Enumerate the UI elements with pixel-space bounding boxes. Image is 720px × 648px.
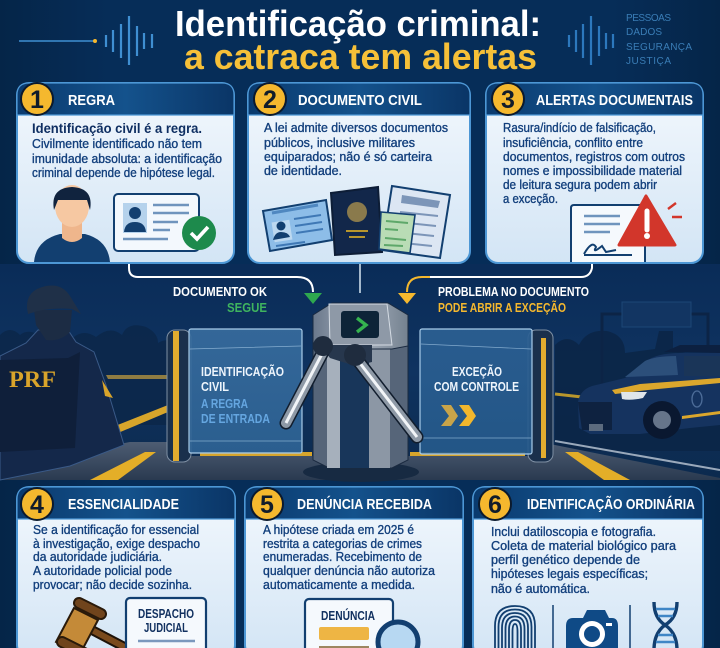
icon: complaint document	[305, 599, 393, 648]
gate text	[201, 364, 284, 426]
road	[0, 440, 720, 480]
header keywords: PESSOAS	[626, 13, 671, 24]
panel 6: identificação ordinária	[473, 487, 703, 648]
icon: complaint document: DENÚNCIA	[321, 608, 375, 623]
text block: Rasura/indício de falsificação,	[503, 120, 656, 135]
text block: de leitura segura podem abrir	[503, 177, 658, 192]
text block: provocar; não decide sozinha.	[33, 577, 192, 592]
road gantry sign	[602, 302, 708, 395]
gate text: EXCEÇÃO	[452, 364, 502, 379]
number badge: 3	[501, 86, 515, 114]
tree silhouettes	[0, 325, 176, 425]
gate text: IDENTIFICAÇÃO	[201, 364, 284, 379]
text block: Coleta de material biológico para	[491, 538, 677, 553]
turnstile	[286, 303, 419, 482]
text block: Inclui datiloscopia e fotografia.	[491, 524, 656, 539]
text block: criminal depende de hipótese legal.	[32, 165, 215, 180]
icon: judicial order	[126, 598, 206, 648]
icon: dna	[654, 602, 677, 648]
title	[175, 3, 541, 77]
number badge: 5	[260, 491, 274, 519]
heading: REGRA	[68, 93, 115, 109]
heading: DOCUMENTO CIVIL	[298, 93, 422, 109]
right glass gate	[420, 329, 553, 462]
icon: signed document	[571, 205, 645, 262]
text block: à investigação, exige despacho	[33, 536, 200, 551]
text block: hipóteses legais específicas;	[491, 566, 648, 581]
icon: double chevron	[441, 405, 476, 426]
panel 5: denúncia recebida	[245, 487, 463, 648]
text block	[503, 120, 685, 206]
gate text: COM CONTROLE	[434, 379, 519, 394]
number badge	[21, 83, 53, 115]
icon: id card	[263, 200, 332, 251]
heading: DENÚNCIA RECEBIDA	[297, 495, 432, 513]
text block: imunidade absoluta: a identificação	[32, 151, 222, 166]
icon: fingerprint	[495, 606, 535, 648]
text block: documentos, registros com outros	[503, 149, 685, 164]
text block: Identificação civil é a regra.	[32, 120, 202, 136]
title: a catraca tem alertas	[184, 36, 537, 77]
text block: da autoridade judiciária.	[33, 549, 162, 564]
number badge	[21, 488, 53, 520]
icon: right signal wave	[569, 16, 613, 65]
text block: de identidade.	[264, 163, 342, 178]
scene: road checkpoint	[0, 264, 720, 480]
title: Identificação criminal:	[175, 3, 541, 44]
gate text: DE ENTRADA	[201, 411, 270, 426]
number badge	[254, 83, 286, 115]
divider	[553, 605, 630, 648]
text block	[32, 120, 222, 180]
text block: Civilmente identificado não tem	[32, 136, 202, 151]
panel 3: alertas documentais	[486, 83, 703, 263]
text block: a exceção.	[503, 191, 558, 206]
number badge: 1	[30, 86, 44, 114]
icon: left signal wave	[19, 16, 152, 65]
header	[19, 3, 692, 77]
text block: A lei admite diversos documentos	[264, 120, 448, 135]
number badge: 4	[30, 491, 44, 519]
icon: person	[34, 185, 110, 262]
left glass gate	[167, 329, 302, 462]
text block: insuficiência, conflito entre	[503, 135, 643, 150]
number badge: 6	[488, 491, 502, 519]
text block: restrita a categorias de crimes	[263, 536, 422, 551]
icon: green document	[379, 212, 415, 253]
icon: gavel	[56, 603, 130, 648]
heading: ESSENCIALIDADE	[68, 497, 179, 513]
arrow: document ok	[129, 264, 322, 304]
gate text: A REGRA	[201, 396, 248, 411]
panel 4: essencialidade	[17, 487, 235, 648]
flow labels: SEGUE	[227, 300, 267, 315]
turnstile screen	[341, 311, 379, 338]
heading: ALERTAS DOCUMENTAIS	[536, 93, 693, 109]
gate text: CIVIL	[201, 379, 229, 394]
text block: A autoridade policial pode	[33, 563, 172, 578]
icon: paper document	[382, 186, 450, 258]
number badge	[492, 83, 524, 115]
flow labels: PROBLEMA NO DOCUMENTO	[438, 284, 589, 299]
center connector	[359, 264, 361, 293]
text block	[263, 522, 436, 592]
panel 2: documento civil	[248, 83, 470, 263]
icon: magnifier	[378, 622, 418, 648]
officer PRF	[0, 285, 124, 480]
text block: nomes e impossibilidade material	[503, 163, 682, 178]
text block: automaticamente a medida.	[263, 577, 415, 592]
text block: públicos, inclusive militares	[264, 135, 415, 150]
vest label PRF: PRF	[9, 367, 56, 392]
header keywords: SEGURANÇA	[626, 42, 692, 53]
text block: qualquer denúncia não autoriza	[263, 563, 436, 578]
icon: id card with check	[114, 194, 216, 251]
police car	[578, 345, 720, 439]
number badge: 2	[263, 86, 277, 114]
panel 1: regra	[17, 83, 234, 263]
flow connectors	[129, 264, 592, 304]
text block	[33, 522, 200, 592]
text block: A hipótese criada em 2025 é	[263, 522, 414, 537]
icon: judicial order: DESPACHO	[138, 606, 194, 621]
header keywords: DADOS	[626, 27, 662, 38]
gate text	[434, 364, 519, 394]
text block: perfil genético depende de	[491, 552, 640, 567]
icon: warning triangle	[619, 196, 682, 245]
flow labels	[173, 284, 589, 315]
icon: passport	[331, 187, 382, 255]
header keywords	[626, 13, 692, 67]
text block: equiparados; não é só carteira	[264, 149, 433, 164]
text block: não é automática.	[491, 581, 590, 596]
arrow: problem in document	[398, 264, 592, 304]
icon: judicial order: JUDICIAL	[144, 620, 188, 635]
turnstile arms	[286, 336, 417, 437]
icon: camera	[566, 610, 618, 648]
text block: Se a identificação for essencial	[33, 522, 199, 537]
number badge	[479, 488, 511, 520]
number badge	[251, 488, 283, 520]
flow labels: PODE ABRIR A EXCEÇÃO	[438, 300, 566, 315]
text block	[264, 120, 448, 178]
header keywords: JUSTIÇA	[626, 56, 671, 67]
text block: enumeradas. Recebimento de	[263, 549, 422, 564]
flow labels: DOCUMENTO OK	[173, 284, 268, 299]
text block	[491, 524, 677, 596]
